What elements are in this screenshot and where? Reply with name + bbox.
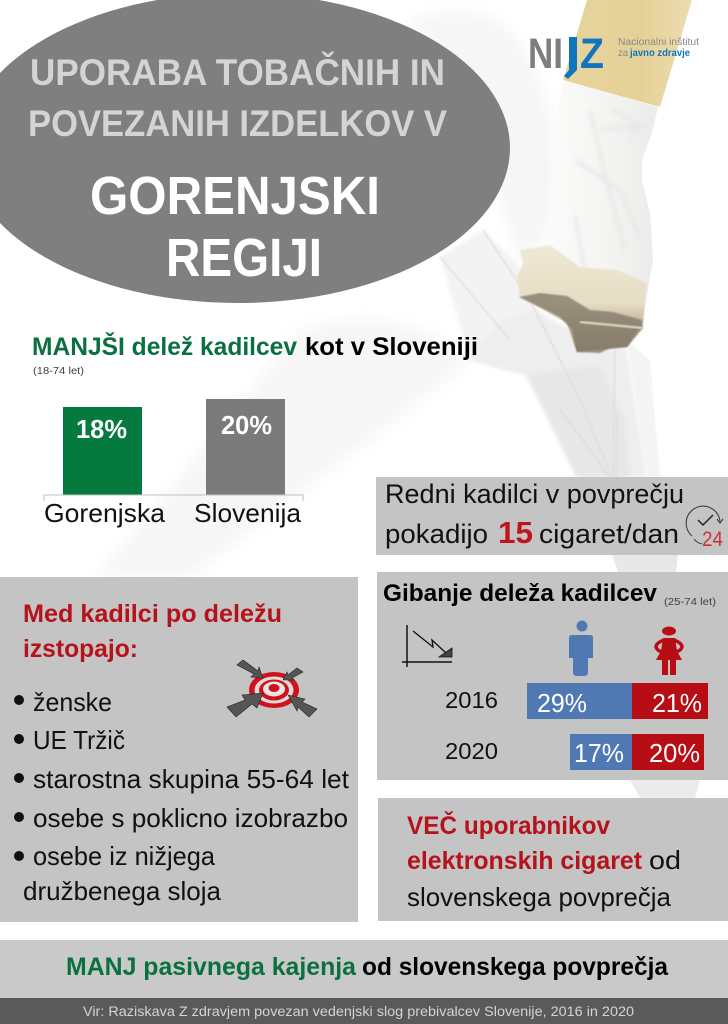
panel heading line 2: izstopajo: — [23, 635, 138, 663]
title line 2: POVEZANIH IZDELKOV V — [28, 103, 447, 144]
item: lower class: osebe iz nižjega — [33, 841, 216, 871]
bar 2020 men — [570, 734, 632, 770]
icon: target with arrows — [227, 660, 317, 717]
icon: 24h clock — [686, 506, 723, 551]
bar: Slovenija — [206, 399, 285, 495]
item: vocational education: osebe s poklicno izobrazbo — [33, 803, 348, 833]
item: age group: starostna skupina 55-64 let — [33, 764, 350, 794]
icon: declining chart — [402, 625, 452, 667]
logo NI: NI — [528, 30, 563, 78]
text od: od — [649, 845, 681, 875]
source text: Vir: Raziskava Z zdravjem povezan vedenjski slog prebivalcev Slovenije, 2016 in 2020 — [83, 1004, 634, 1019]
panel: e-cigarettes — [378, 798, 728, 921]
age note: (25-74 let) — [664, 597, 716, 608]
footer — [0, 998, 728, 1024]
year 2020: 2020 — [445, 738, 498, 764]
icon: 24h clock: 24 — [702, 528, 723, 551]
value 29%: 29% — [537, 688, 587, 718]
text line 1: Redni kadilci v povprečju — [385, 479, 684, 509]
ash highlight — [580, 322, 642, 328]
item: ženske: ženske — [33, 687, 112, 717]
bar chart — [44, 399, 303, 528]
icon: woman — [656, 626, 682, 675]
burned tip — [517, 245, 647, 352]
label Slovenija: Slovenija — [194, 498, 302, 528]
text cigaret/dan: cigaret/dan — [539, 519, 679, 549]
cigarette — [517, 0, 692, 353]
panel heading: Gibanje deleža kadilcev — [383, 580, 658, 607]
logo J mark — [564, 37, 577, 79]
item: lower class: družbenega sloja — [23, 876, 222, 906]
age note: (18-74 let) — [33, 366, 84, 377]
logo name line 2: javno zdravje — [629, 47, 690, 59]
item: UE Tržič: UE Tržič — [33, 725, 125, 755]
bar 2016 men — [527, 683, 632, 719]
cigarette filter — [563, 0, 692, 107]
title line 1: UPORABA TOBAČNIH IN — [30, 51, 445, 93]
green text: MANJ pasivnega kajenja — [66, 953, 357, 981]
heading: MANJŠI delež kadilcev — [32, 331, 297, 361]
logo name line 1: Nacionalni inštitut — [618, 36, 699, 48]
value 18%: 18% — [76, 414, 127, 444]
bar: Gorenjska — [63, 407, 142, 495]
number 15: 15 — [498, 515, 533, 550]
label Gorenjska: Gorenjska — [44, 498, 166, 528]
title ellipse — [0, 0, 510, 303]
bar 2016 women — [632, 683, 708, 719]
text line 3: slovenskega povprečja — [407, 882, 672, 912]
title line 3: GORENJSKI — [90, 166, 380, 226]
heading: kot v Sloveniji — [305, 333, 478, 361]
panel: standout groups — [0, 577, 358, 922]
item: lower class — [14, 841, 222, 906]
panel heading: Med kadilci po deležu — [23, 600, 282, 628]
title line 4: REGIJI — [166, 228, 322, 288]
black text: od slovenskega povprečja — [362, 953, 669, 981]
heading — [32, 331, 478, 361]
NIJZ logo — [528, 30, 699, 79]
title — [28, 51, 447, 288]
text line 1: VEČ uporabnikov — [407, 810, 610, 840]
bullet list — [14, 687, 350, 906]
band: passive smoking — [0, 940, 728, 998]
panel: smokers trend — [377, 572, 728, 780]
value 21%: 21% — [652, 688, 702, 718]
panel: daily cigarettes — [376, 477, 728, 555]
cigarette paper — [530, 80, 658, 318]
text line 2: pokadijo — [385, 519, 488, 549]
value 20%: 20% — [649, 738, 700, 768]
paper creases — [575, 110, 650, 300]
value 20%: 20% — [221, 410, 272, 440]
bar 2020 women — [632, 734, 704, 770]
text line 2: elektronskih cigaret — [407, 847, 643, 875]
value 17%: 17% — [574, 738, 624, 768]
smoke illustration — [95, 11, 700, 798]
icon: man — [569, 620, 593, 676]
logo name line 2: za — [618, 47, 628, 59]
smokers share section — [32, 331, 478, 528]
ash — [519, 293, 643, 353]
logo Z: Z — [580, 30, 604, 78]
year 2016: 2016 — [445, 687, 498, 713]
